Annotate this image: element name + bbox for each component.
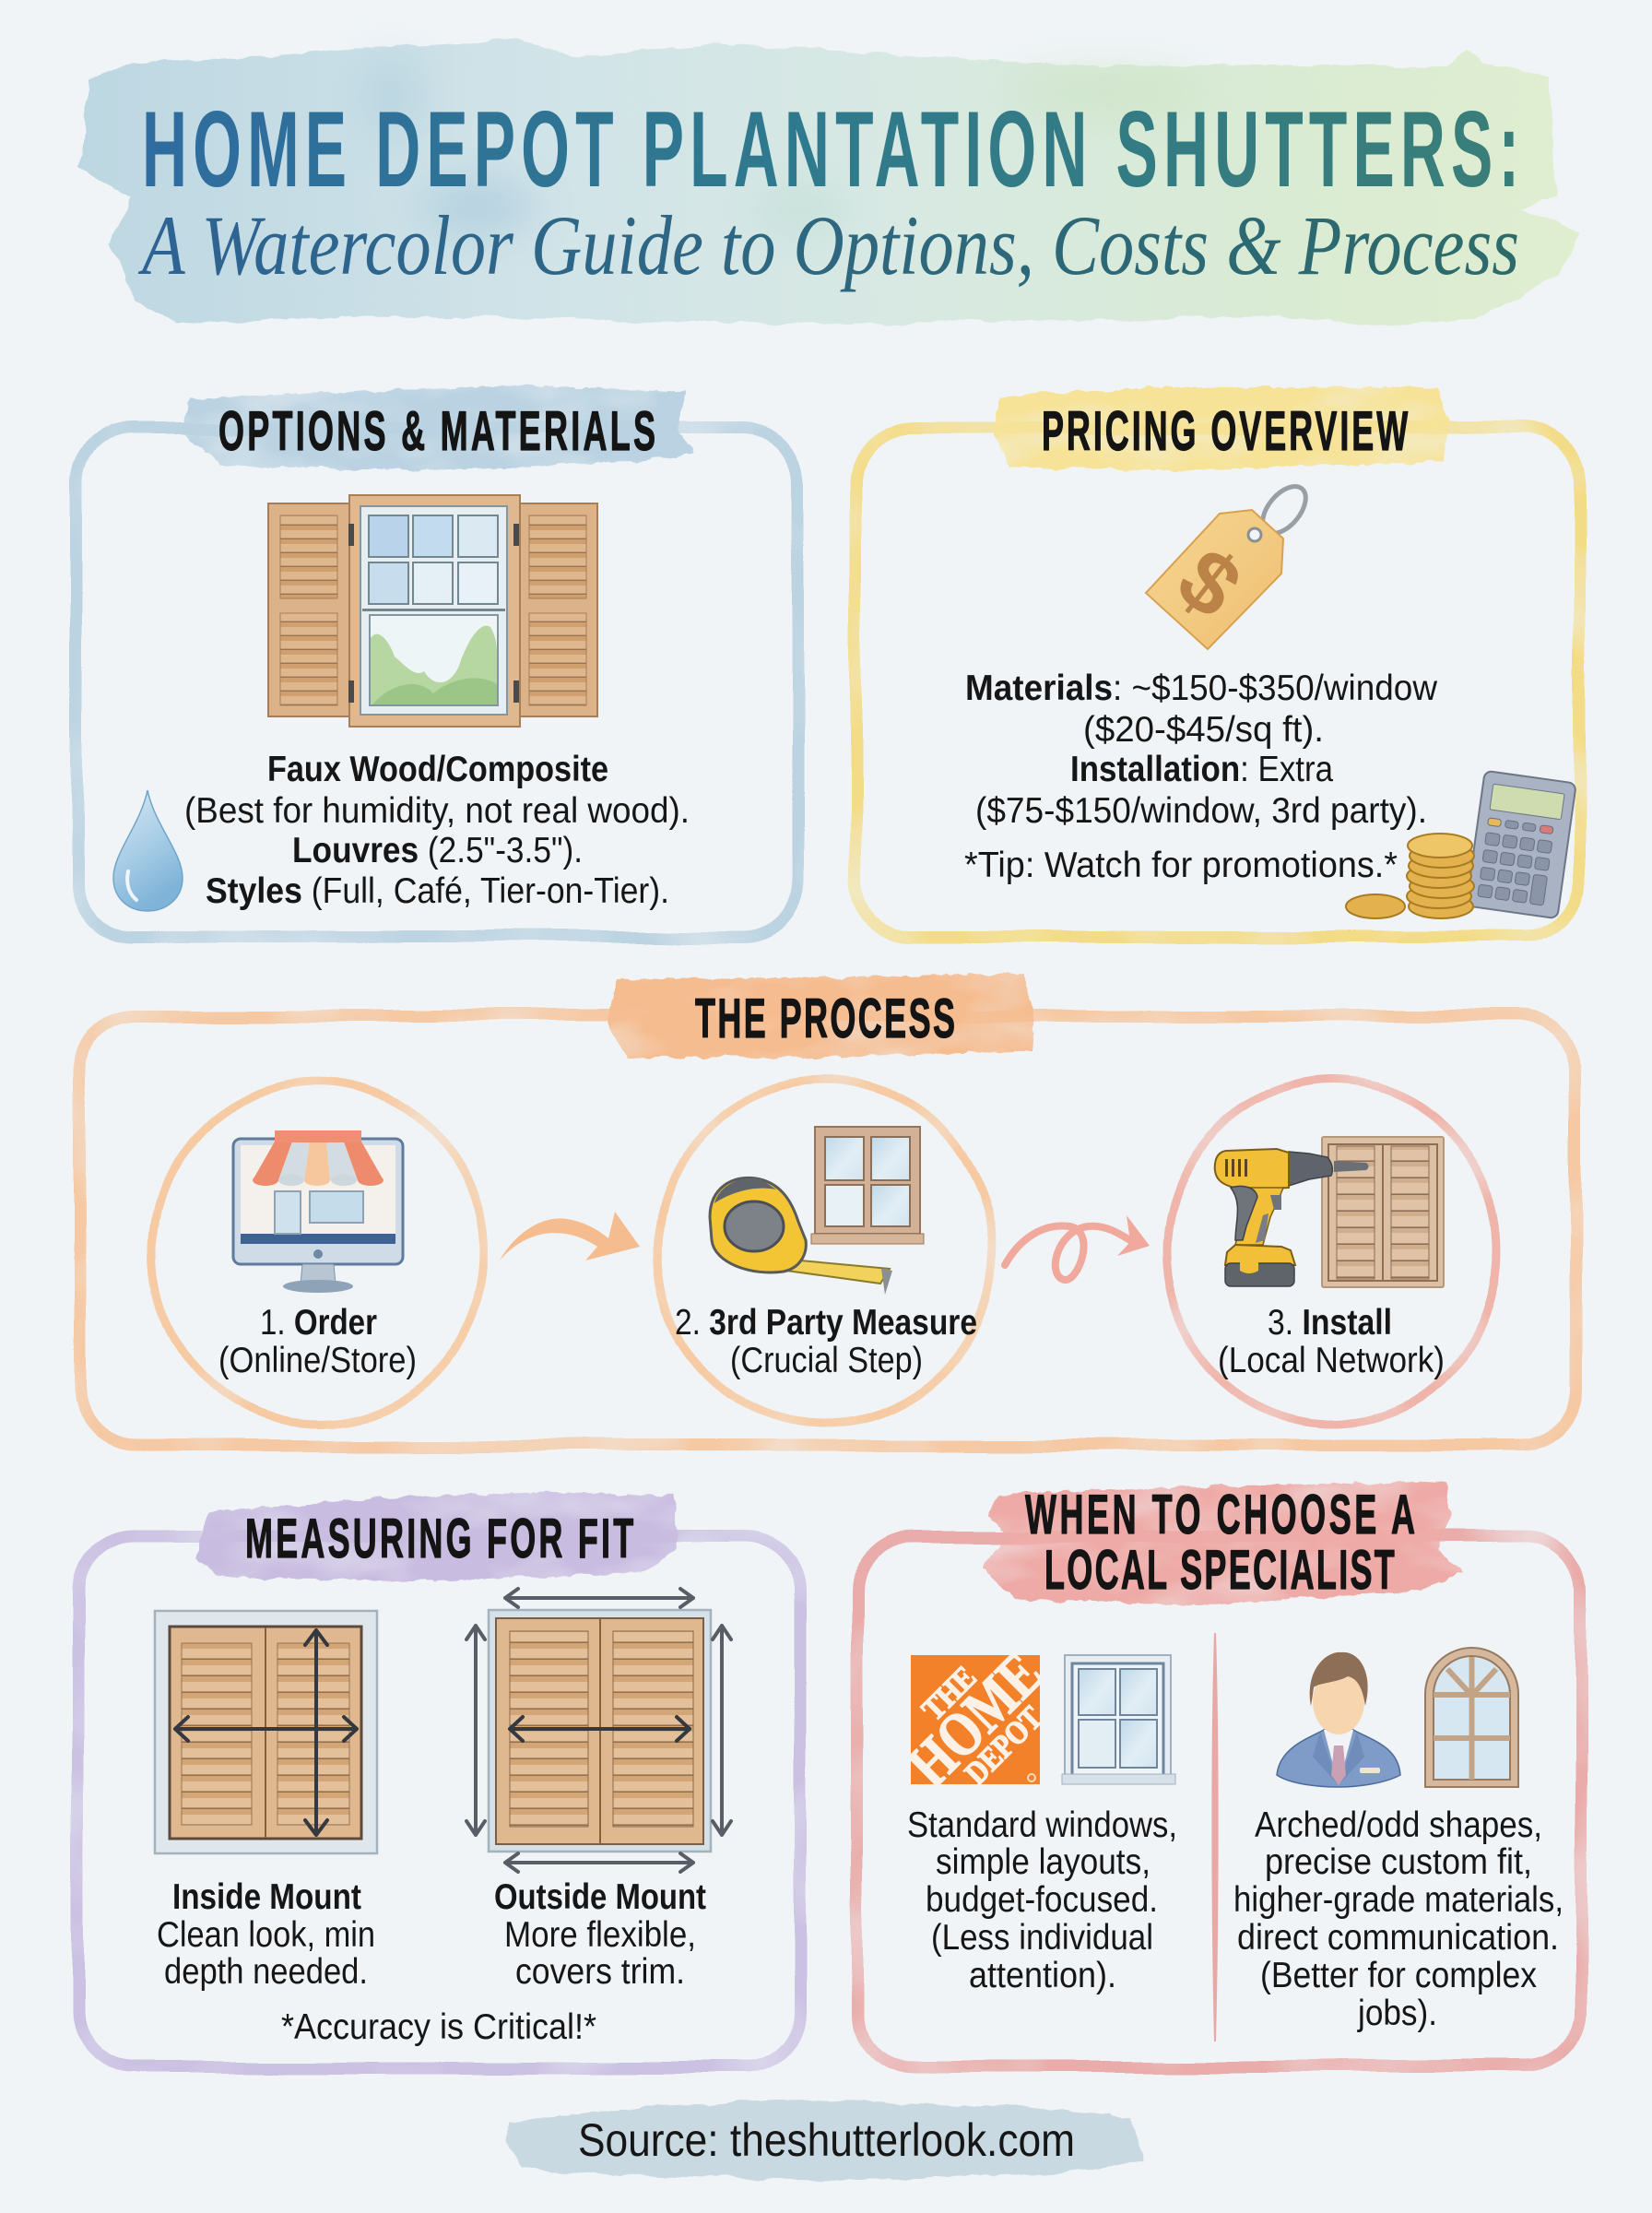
panel: measuring for fit [77,1492,800,2067]
text block: specialist: precise custom fit, [1265,1842,1532,1882]
label: order [218,1303,417,1380]
heading: options and materials [182,385,692,470]
text block: pricing [964,669,1438,885]
label: measure [675,1303,977,1380]
icon: home depot logo: DEPOT [958,1699,1050,1792]
banner wash [79,39,1580,325]
text block: inside mount: Inside Mount [172,1877,361,1917]
heading: local specialist [983,1481,1464,1605]
text block: home depot: simple layouts, [936,1842,1150,1882]
icon: window [811,1127,924,1244]
divider [1212,1633,1218,2041]
text block: inside mount: Clean look, min [157,1915,375,1955]
icon: specialist person [1277,1652,1400,1787]
heading: pricing overview [993,387,1449,470]
text block: materials: (Best for humidity, not real wood). [184,791,690,831]
step 2: measure [657,1081,993,1424]
heading: measuring for fit [196,1492,678,1581]
label: measure: 2. 3rd Party Measure [675,1303,977,1343]
text block: specialist [1233,1805,1564,2033]
panel: local specialist [857,1481,1581,2067]
arrow: measure to install [1005,1215,1150,1280]
title banner [79,39,1580,325]
text block: specialist: jobs). [1357,1994,1437,2033]
text block: inside mount: depth needed. [164,1952,368,1992]
icon: home depot logo [911,1655,1040,1784]
text block: inside mount [157,1877,375,1992]
text block: pricing: ($20-$45/sq ft). [1083,710,1324,750]
icon: window with shutters [268,495,597,727]
text block: specialist: (Better for complex [1260,1956,1537,1995]
text block: specialist: higher-grade materials, [1233,1880,1564,1920]
heading: local specialist: LOCAL SPECIALIST [1044,1540,1395,1601]
step 3: install [1165,1081,1499,1424]
callout: accuracy: *Accuracy is Critical!* [281,2007,596,2047]
icon: water drop [113,790,183,911]
text block: home depot: (Less individual [931,1918,1153,1958]
heading: the process: THE PROCESS [695,988,955,1049]
text block: outside mount: Outside Mount [494,1877,706,1917]
label: install [1218,1303,1445,1380]
text block: pricing: *Tip: Watch for promotions.* [964,846,1398,885]
text block: outside mount: covers trim. [515,1952,685,1992]
arrow: order to measure [500,1212,640,1260]
heading: the process [607,974,1034,1058]
text block: outside mount: More flexible, [504,1915,696,1955]
text block: home depot: attention). [969,1956,1116,1995]
source footer [505,2100,1145,2181]
text block: home depot: Standard windows, [907,1805,1177,1845]
source footer: Source: theshutterlook.com [578,2114,1075,2166]
icon: shutter [1322,1137,1444,1287]
text block: materials [184,750,690,911]
icon: price tag [1146,479,1314,649]
label: order: 1. Order [260,1303,377,1343]
label: measure: (Crucial Step) [730,1341,923,1380]
text block: pricing: Installation: Extra [1070,750,1333,789]
diagram: outside mount [466,1589,731,1872]
panel: the process [81,974,1575,1446]
heading: options and materials: OPTIONS & MATERIALS [218,401,655,462]
text block: outside mount [494,1877,706,1992]
text block: home depot [907,1805,1177,1995]
label: order: (Online/Store) [218,1341,417,1380]
icon: coins [1346,834,1474,918]
heading: local specialist: WHEN TO CHOOSE A [1025,1485,1415,1545]
text block: materials: Faux Wood/Composite [267,750,608,789]
icon: home depot logo: THE [914,1659,983,1727]
icon: drill [1215,1149,1368,1286]
main title: HOME DEPOT PLANTATION SHUTTERS: [142,89,1519,210]
icon: online store [233,1130,403,1293]
diagram: inside mount [155,1611,377,1853]
icon: home depot logo: HOME [894,1639,1056,1800]
text block: pricing: ($75-$150/window, 3rd party). [975,791,1427,831]
heading: measuring for fit: MEASURING FOR FIT [245,1509,633,1569]
text block: specialist: Arched/odd shapes, [1255,1805,1542,1845]
label: install: 3. Install [1268,1303,1392,1343]
text block: materials: Styles (Full, Café, Tier-on-Tier). [206,871,669,911]
icon: price tag: $ [1160,529,1259,637]
panel: pricing overview [856,387,1579,937]
text block: pricing: Materials: ~$150-$350/window [965,669,1438,708]
icon: standard window [1062,1655,1175,1784]
label: install: (Local Network) [1218,1341,1445,1380]
text block: materials: Louvres (2.5"-3.5"). [292,831,583,870]
icon: tape measure [710,1178,892,1295]
panel: options and materials [77,385,798,937]
heading: pricing overview: PRICING OVERVIEW [1042,401,1408,462]
text block: specialist: direct communication. [1237,1918,1559,1958]
icon: calculator [1466,771,1576,918]
text block: home depot: budget-focused. [926,1880,1158,1920]
icon: arched window [1425,1648,1518,1787]
step 1: order [152,1081,484,1424]
